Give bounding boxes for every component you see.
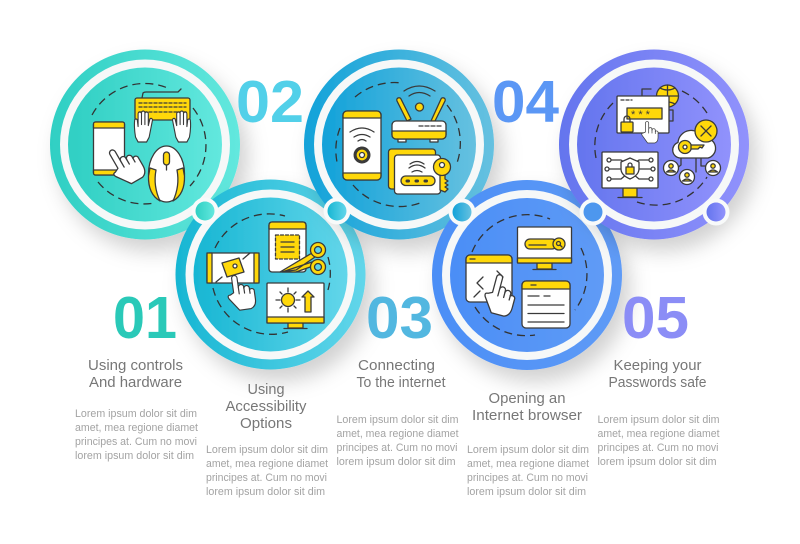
text block: step 1: principes at. Cum no movi bbox=[75, 436, 197, 448]
heading: step 4 bbox=[472, 391, 582, 424]
number 03: 03 bbox=[366, 285, 433, 351]
dashed orbit bbox=[472, 215, 587, 336]
icon: monitor with search bar bbox=[518, 227, 572, 270]
text block: step 5 bbox=[598, 414, 720, 468]
icon: cloud keys and users bbox=[664, 120, 720, 184]
icon: mouse bbox=[148, 146, 185, 202]
number 02: 02 bbox=[236, 69, 304, 135]
heading: step 2: Using bbox=[248, 382, 284, 398]
panel: step 3 circle bbox=[304, 50, 494, 240]
heading: step 2: Accessibility bbox=[226, 399, 307, 415]
number 01: 01 bbox=[113, 285, 177, 351]
number 05: 05 bbox=[622, 285, 689, 351]
icon: monitor with brightness bbox=[267, 283, 324, 328]
text block: step 3: Lorem ipsum dolor sit dim bbox=[336, 414, 458, 426]
ring: step 4 disc bbox=[432, 180, 622, 370]
text block: step 2: lorem ipsum dolor sit dim bbox=[206, 486, 325, 498]
icon: secure network monitor bbox=[602, 152, 658, 198]
text block: step 5: principes at. Cum no movi bbox=[598, 442, 718, 454]
icon: cropped document and scissors bbox=[269, 222, 326, 274]
heading: step 1: And hardware bbox=[89, 375, 182, 391]
heading: step 2 bbox=[226, 382, 307, 432]
icon: phone with wifi and gear bbox=[343, 111, 381, 180]
icon: keyboard and hands bbox=[134, 89, 191, 142]
dashed orbit bbox=[92, 83, 206, 204]
heading: step 3 bbox=[356, 358, 446, 391]
panel: step 1 circle bbox=[50, 50, 240, 240]
icon: password card and key bbox=[388, 149, 450, 194]
text block: step 3: lorem ipsum dolor sit dim bbox=[336, 456, 456, 468]
text block: step 4: principes at. Cum no movi bbox=[467, 472, 588, 484]
icon: code window with hand bbox=[466, 255, 520, 318]
heading: step 1 bbox=[88, 358, 183, 391]
heading: step 5: Passwords safe bbox=[608, 375, 706, 391]
ring: step 1 disc bbox=[50, 50, 240, 240]
heading: step 5 bbox=[608, 358, 706, 391]
icon: wifi router bbox=[392, 86, 446, 142]
text block: step 3: amet, mea regione diamet bbox=[336, 428, 458, 440]
icon: login window, globe and hand: * * * bbox=[631, 109, 651, 121]
text block: step 1: amet, mea regione diamet bbox=[75, 422, 198, 434]
heading: step 1: Using controls bbox=[88, 358, 183, 374]
text block: step 5: amet, mea regione diamet bbox=[598, 428, 720, 440]
text block: step 4 bbox=[467, 444, 589, 498]
text block: step 2 bbox=[206, 444, 328, 498]
text block: step 3 bbox=[336, 414, 458, 468]
text block: step 2: amet, mea regione diamet bbox=[206, 458, 328, 470]
text block: step 2: principes at. Cum no movi bbox=[206, 472, 327, 484]
icon: text window bbox=[522, 281, 570, 328]
dashed orbit bbox=[336, 83, 460, 207]
number 04: 04 bbox=[492, 69, 559, 135]
text block: step 4: Lorem ipsum dolor sit dim bbox=[467, 444, 589, 456]
text block: step 2: Lorem ipsum dolor sit dim bbox=[206, 444, 328, 456]
heading: step 4: Internet browser bbox=[472, 408, 582, 424]
panel: step 4 circle bbox=[432, 180, 622, 370]
ring: step 2 disc bbox=[176, 180, 366, 370]
panel: step 2 circle bbox=[176, 180, 366, 370]
text block: step 4: lorem ipsum dolor sit dim bbox=[467, 486, 586, 498]
connector dots bbox=[192, 198, 730, 226]
panel: step 5 circle bbox=[559, 50, 749, 240]
heading: step 4: Opening an bbox=[488, 391, 566, 407]
text block: step 1: lorem ipsum dolor sit dim bbox=[75, 450, 194, 462]
icon: resizing image on tablet bbox=[207, 253, 259, 311]
text block: step 4: amet, mea regione diamet bbox=[467, 458, 589, 470]
heading: step 3: To the internet bbox=[356, 375, 446, 391]
ring: step 5 disc bbox=[559, 50, 749, 240]
text block: step 3: principes at. Cum no movi bbox=[336, 442, 458, 454]
text block: step 5: lorem ipsum dolor sit dim bbox=[598, 456, 716, 468]
heading: step 2: Options bbox=[240, 416, 292, 432]
icon: tablet with hand bbox=[94, 122, 148, 189]
heading: step 5: Keeping your bbox=[614, 358, 702, 374]
text block: step 1 bbox=[75, 408, 198, 462]
heading: step 3: Connecting bbox=[358, 358, 435, 374]
dashed orbit bbox=[213, 214, 330, 334]
text block: step 5: Lorem ipsum dolor sit dim bbox=[598, 414, 720, 426]
ring: step 3 disc bbox=[304, 50, 494, 240]
text block: step 1: Lorem ipsum dolor sit dim bbox=[75, 408, 197, 420]
icon: login window, globe and hand bbox=[617, 85, 678, 143]
dashed orbit bbox=[595, 91, 707, 205]
